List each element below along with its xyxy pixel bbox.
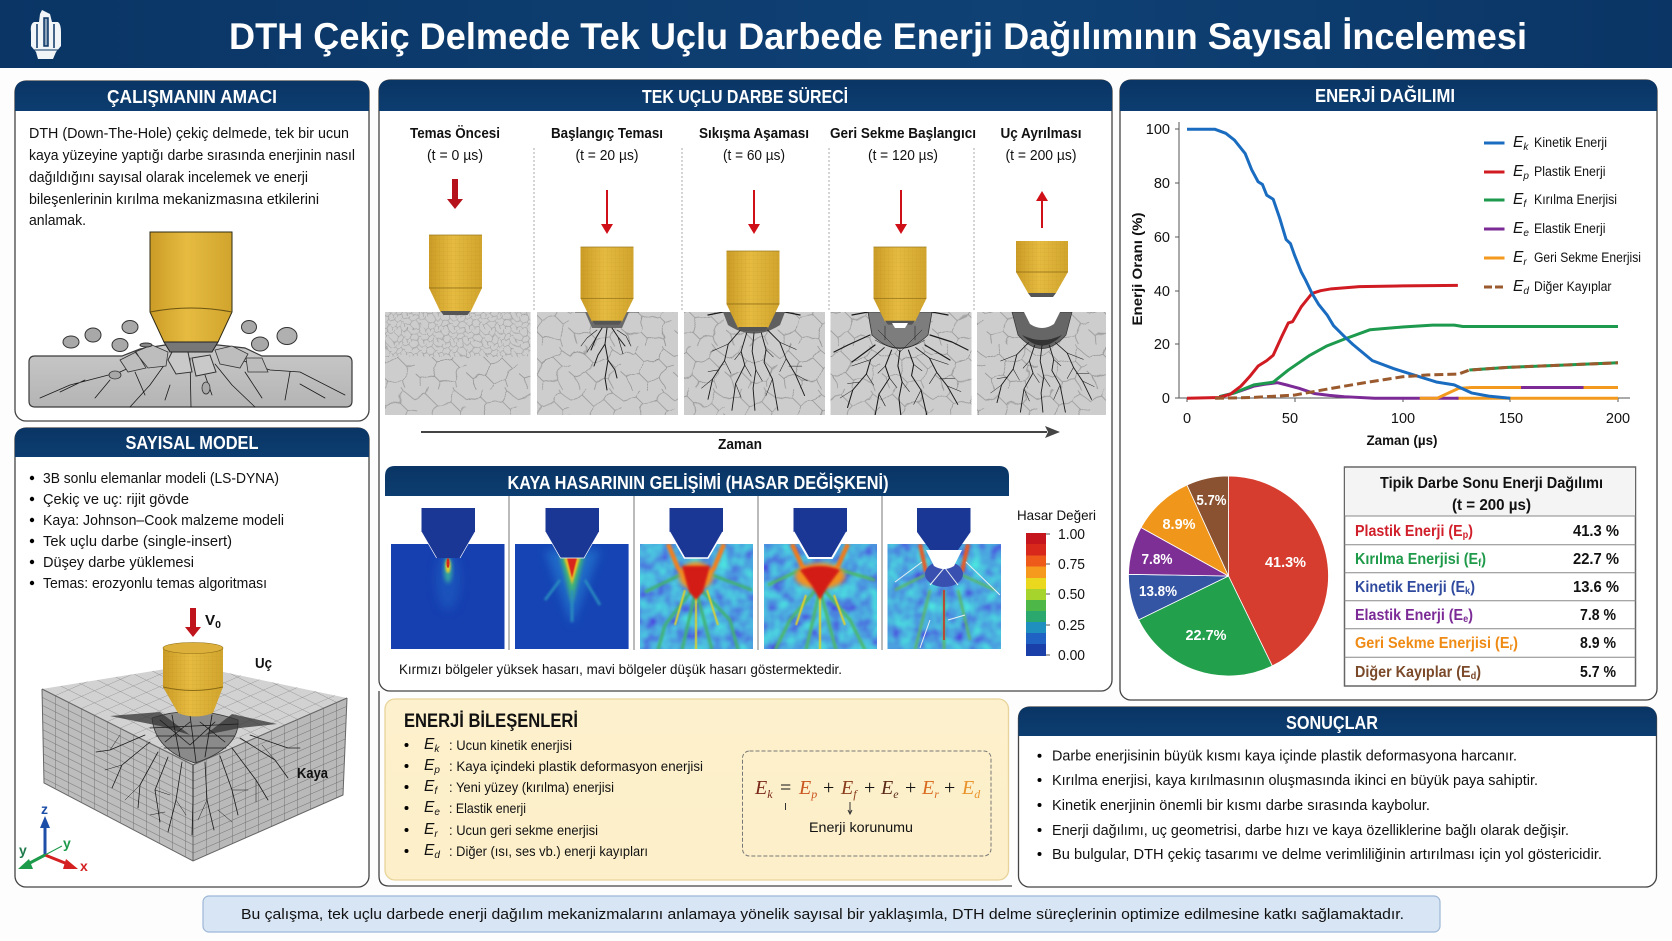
stage 5: uç ayrılması: (t = 200 µs) bbox=[1006, 148, 1076, 164]
conclusions list: Darbe enerjisinin büyük kısmı kaya içinde plastik deformasyona harcanır. bbox=[1052, 749, 1517, 765]
bullet list: Düşey darbe yüklemesi bbox=[43, 555, 194, 571]
table: end-of-impact energy distribution: Diğer Kayıplar (E bbox=[1355, 664, 1480, 681]
pie chart: 22.7% bbox=[1186, 627, 1226, 644]
line chart: 0 bbox=[1162, 391, 1170, 407]
icon: coordinate axes bbox=[18, 801, 88, 874]
panel: sayısal model bbox=[15, 428, 369, 887]
energy conservation equation box: E bbox=[841, 777, 853, 799]
energy conservation equation box: + bbox=[864, 777, 875, 799]
panel: tek uçlu darbe süreci bbox=[379, 80, 1113, 886]
chart legend: r bbox=[1523, 257, 1527, 268]
energy conservation equation box: e bbox=[893, 787, 899, 801]
pie chart: 13.8% bbox=[1139, 583, 1177, 600]
bullet list: Kaya: Johnson–Cook malzeme modeli bbox=[43, 513, 284, 529]
colorbar legend: 0.50 bbox=[1058, 587, 1085, 603]
colorbar legend: 0.00 bbox=[1058, 648, 1085, 664]
chart legend: E bbox=[1513, 191, 1523, 208]
chart legend: Elastik Enerji bbox=[1534, 221, 1606, 236]
chart legend: Kinetik Enerji bbox=[1534, 135, 1607, 150]
illustration: tool striking rock bbox=[29, 232, 352, 407]
stage 1: temas öncesi bbox=[380, 125, 536, 420]
purpose text block: bileşenlerinin kırılma mekanizmasına etkilerini bbox=[29, 192, 319, 208]
damage map 2 bbox=[515, 508, 629, 649]
energy component list: E bbox=[424, 757, 434, 774]
colorbar legend: 0.75 bbox=[1058, 557, 1085, 573]
table: end-of-impact energy distribution: 5.7 % bbox=[1580, 664, 1616, 681]
bullet list: Çekiç ve uç: rijit gövde bbox=[43, 492, 189, 508]
table: end-of-impact energy distribution: Tipik Darbe Sonu Enerji Dağılımı bbox=[1380, 475, 1603, 492]
table: end-of-impact energy distribution: ) bbox=[1470, 579, 1475, 596]
table: end-of-impact energy distribution: Elastik Enerji (E bbox=[1355, 607, 1472, 624]
panel: sonuçlar bbox=[1018, 707, 1656, 887]
chart legend: p bbox=[1522, 171, 1529, 182]
energy component list bbox=[404, 736, 703, 861]
chart legend: Diğer Kayıplar bbox=[1534, 279, 1612, 294]
bullet list bbox=[30, 471, 284, 592]
heading: ENERJİ DAĞILIMI bbox=[1315, 85, 1455, 106]
energy component list: : Elastik enerji bbox=[449, 800, 526, 816]
heading: SONUÇLAR bbox=[1286, 713, 1378, 733]
stage 5: uç ayrılması: Uç Ayrılması bbox=[1000, 126, 1082, 142]
colorbar legend: 1.00 bbox=[1058, 527, 1085, 543]
footer summary bar: Bu çalışma, tek uçlu darbede enerji dağılım mekanizmalarını anlamaya yönelik sayısal bir yaklaşımla, DTH delme süreçlerinin optimize edilmesine katkı sağlamaktadır. bbox=[241, 906, 1404, 923]
table: end-of-impact energy distribution: ) bbox=[1468, 607, 1473, 624]
chart legend: E bbox=[1513, 134, 1523, 151]
chart legend: Kırılma Enerjisi bbox=[1534, 192, 1617, 207]
stage 2: başlangıç teması: (t = 20 µs) bbox=[576, 148, 638, 164]
energy component list: : Kaya içindeki plastik deformasyon enerjisi bbox=[449, 758, 703, 774]
line chart: 40 bbox=[1154, 284, 1170, 300]
line chart: 100 bbox=[1391, 411, 1415, 427]
energy conservation equation box bbox=[742, 751, 991, 856]
title: DTH Çekiç Delmede Tek Uçlu Darbede Enerji Dağılımının Sayısal İncelemesi bbox=[229, 16, 1527, 57]
label: Kaya: Kaya bbox=[297, 766, 329, 782]
arrow: zaman bbox=[421, 426, 1060, 453]
icon: coordinate axes: x bbox=[80, 858, 88, 874]
pie chart bbox=[1128, 476, 1329, 676]
damage map 3 bbox=[640, 508, 753, 650]
damage map 1 bbox=[391, 508, 504, 649]
stage 4: geri sekme başlangıcı bbox=[824, 126, 979, 420]
purpose text block: anlamak. bbox=[29, 213, 86, 229]
caption: Kırmızı bölgeler yüksek hasarı, mavi bölgeler düşük hasarı göstermektedir. bbox=[399, 661, 842, 677]
line chart: 200 bbox=[1606, 411, 1630, 427]
energy component list: : Ucun geri sekme enerjisi bbox=[449, 822, 598, 838]
stage 1: temas öncesi: Temas Öncesi bbox=[410, 125, 500, 142]
heading: SAYISAL MODEL bbox=[126, 433, 259, 453]
panel: enerji bileşenleri bbox=[385, 699, 1008, 880]
energy component list: E bbox=[424, 799, 434, 816]
pie chart: 5.7% bbox=[1196, 492, 1226, 509]
energy conservation equation box: + bbox=[905, 777, 916, 799]
stage 3: sıkışma aşaması: Sıkışma Aşaması bbox=[699, 126, 809, 142]
conclusions list bbox=[1038, 749, 1602, 863]
table: end-of-impact energy distribution: Plastik Enerji (E bbox=[1355, 523, 1472, 540]
energy conservation equation box: Enerji korunumu bbox=[809, 819, 913, 835]
energy component list: E bbox=[424, 821, 434, 838]
line chart: 0 bbox=[1183, 411, 1191, 427]
chart legend: k bbox=[1523, 142, 1529, 153]
table: end-of-impact energy distribution: 41.3 % bbox=[1573, 523, 1619, 540]
line chart: 100 bbox=[1146, 122, 1170, 138]
stage 2: başlangıç teması: Başlangıç Teması bbox=[551, 126, 663, 142]
conclusions list: Kırılma enerjisi, kaya kırılmasının oluşmasında ikinci en büyük paya sahiptir. bbox=[1052, 773, 1538, 789]
energy component list: : Yeni yüzey (kırılma) enerjisi bbox=[449, 779, 614, 795]
arrow: V0 impact velocity: 0 bbox=[215, 620, 221, 631]
line chart: 20 bbox=[1154, 337, 1170, 353]
chart legend: e bbox=[1523, 228, 1529, 239]
bullet list: Temas: erozyonlu temas algoritması bbox=[43, 576, 267, 592]
energy conservation equation box: E bbox=[799, 777, 811, 799]
energy component list: d bbox=[434, 850, 440, 861]
table: end-of-impact energy distribution: d bbox=[1471, 671, 1476, 682]
heading: ÇALIŞMANIN AMACI bbox=[107, 87, 277, 107]
table: end-of-impact energy distribution bbox=[1344, 467, 1636, 686]
energy conservation equation box: E bbox=[922, 777, 934, 799]
damage map 4 bbox=[764, 508, 877, 650]
table: end-of-impact energy distribution: 13.6 % bbox=[1573, 579, 1619, 596]
line chart: 50 bbox=[1282, 411, 1298, 427]
table: end-of-impact energy distribution: (t = 200 µs) bbox=[1452, 497, 1531, 514]
line chart bbox=[1129, 122, 1641, 448]
icon: DTH drill hammer logo bbox=[31, 10, 61, 59]
chart legend: E bbox=[1513, 249, 1523, 266]
energy conservation equation box: d bbox=[974, 787, 981, 801]
energy conservation equation box: f bbox=[853, 787, 858, 801]
energy conservation equation box: E bbox=[755, 777, 767, 799]
pie chart: 41.3% bbox=[1265, 554, 1306, 571]
stage 4: geri sekme başlangıcı: (t = 120 µs) bbox=[868, 148, 938, 164]
stage 3: sıkışma aşaması: (t = 60 µs) bbox=[723, 148, 785, 164]
footer summary bar bbox=[203, 896, 1440, 932]
heading: ENERJİ BİLEŞENLERİ bbox=[404, 711, 578, 732]
panel: enerji dağılımı bbox=[203, 80, 1657, 932]
energy component list: k bbox=[434, 744, 440, 755]
energy conservation equation box: + bbox=[944, 777, 955, 799]
colorbar legend: Hasar Değeri bbox=[1017, 507, 1096, 523]
purpose text block: kaya yüzeyine yaptığı darbe sırasında enerjinin nasıl bbox=[29, 148, 355, 164]
colorbar legend bbox=[1017, 507, 1096, 664]
conclusions list: Enerji dağılımı, uç geometrisi, darbe hızı ve kaya özelliklerine bağlı olarak değişir. bbox=[1052, 823, 1569, 839]
energy conservation equation box: r bbox=[934, 787, 939, 801]
table: end-of-impact energy distribution: p bbox=[1463, 530, 1468, 541]
icon: coordinate axes: y bbox=[63, 835, 71, 851]
chart legend: Plastik Enerji bbox=[1534, 164, 1606, 179]
outline continuation beneath components panel bbox=[379, 691, 1012, 886]
chart legend: E bbox=[1513, 220, 1523, 237]
purpose text block bbox=[29, 126, 355, 229]
energy component list: E bbox=[424, 736, 434, 753]
energy conservation equation box: E bbox=[881, 777, 893, 799]
energy component list: E bbox=[424, 778, 434, 795]
line chart: 60 bbox=[1154, 230, 1170, 246]
table: end-of-impact energy distribution: k bbox=[1465, 586, 1471, 597]
icon: coordinate axes: z bbox=[41, 801, 48, 817]
table: end-of-impact energy distribution: ) bbox=[1481, 551, 1486, 568]
pie chart: 8.9% bbox=[1162, 516, 1196, 533]
table: end-of-impact energy distribution: Kinetik Enerji (E bbox=[1355, 579, 1474, 596]
energy conservation equation box: + bbox=[823, 777, 834, 799]
table: end-of-impact energy distribution: f bbox=[1478, 558, 1482, 569]
arrow: zaman: Zaman bbox=[718, 437, 762, 453]
chart legend: E bbox=[1513, 163, 1523, 180]
bullet list: 3B sonlu elemanlar modeli (LS-DYNA) bbox=[43, 471, 279, 487]
stage 4: geri sekme başlangıcı: Geri Sekme Başlangıcı bbox=[830, 126, 976, 142]
header band bbox=[0, 0, 1672, 68]
arrow: V0 impact velocity: V bbox=[205, 613, 215, 629]
panel: çalışmanın amacı bbox=[15, 81, 369, 421]
line chart: Enerji Oranı (%) bbox=[1129, 212, 1145, 326]
energy conservation equation box: = bbox=[780, 777, 791, 799]
table: end-of-impact energy distribution: 22.7 % bbox=[1573, 551, 1619, 568]
heading: TEK UÇLU DARBE SÜRECİ bbox=[642, 87, 848, 107]
table: end-of-impact energy distribution: ) bbox=[1513, 635, 1518, 652]
colorbar legend: 0.25 bbox=[1058, 618, 1085, 634]
energy component list: p bbox=[433, 765, 440, 776]
stage 2: başlangıç teması bbox=[537, 127, 678, 415]
stage separators bbox=[534, 148, 974, 312]
energy component list: : Diğer (ısı, ses vb.) enerji kayıpları bbox=[449, 843, 648, 859]
energy conservation equation box: p bbox=[810, 787, 817, 801]
table: end-of-impact energy distribution: 8.9 % bbox=[1580, 635, 1616, 652]
panel: kaya hasarının gelişimi bbox=[385, 466, 1096, 677]
3D rock block mesh bbox=[42, 665, 347, 861]
line chart: 150 bbox=[1499, 411, 1523, 427]
arrow: V0 impact velocity bbox=[185, 608, 221, 637]
energy component list: e bbox=[434, 807, 440, 818]
table: end-of-impact energy distribution: 7.8 % bbox=[1580, 607, 1616, 624]
pie chart: 7.8% bbox=[1142, 551, 1172, 568]
chart legend bbox=[1484, 134, 1641, 297]
table: end-of-impact energy distribution: e bbox=[1463, 614, 1469, 625]
stage 3: sıkışma aşaması bbox=[684, 127, 825, 415]
line chart: Zaman (µs) bbox=[1366, 432, 1438, 448]
stage 1: temas öncesi: (t = 0 µs) bbox=[427, 148, 483, 164]
chart legend: Geri Sekme Enerjisi bbox=[1534, 250, 1641, 265]
conclusions list: Kinetik enerjinin önemli bir kısmı darbe sırasında kaybolur. bbox=[1052, 798, 1430, 814]
table: end-of-impact energy distribution: r bbox=[1510, 642, 1513, 653]
energy component list: f bbox=[434, 786, 438, 797]
table: end-of-impact energy distribution: Kırılma Enerjisi (E bbox=[1355, 551, 1488, 568]
bullet list: Tek uçlu darbe (single-insert) bbox=[43, 534, 232, 550]
energy conservation equation box: E bbox=[962, 777, 974, 799]
purpose text block: dağıldığını sayısal olarak incelemek ve enerji bbox=[29, 170, 308, 186]
conclusions list: Bu bulgular, DTH çekiç tasarımı ve delme verimliliğinin artırılması için yol göstericidir. bbox=[1052, 847, 1602, 863]
table: end-of-impact energy distribution: ) bbox=[1476, 664, 1481, 681]
chart legend: E bbox=[1513, 278, 1523, 295]
stage 5: uç ayrılması bbox=[977, 127, 1106, 415]
label: Uç: Uç bbox=[255, 656, 272, 672]
energy component list: E bbox=[424, 842, 434, 859]
energy component list: r bbox=[434, 829, 438, 840]
energy component list: : Ucun kinetik enerjisi bbox=[449, 737, 572, 753]
icon: Uç tip bbox=[163, 642, 223, 716]
line chart: 80 bbox=[1154, 176, 1170, 192]
chart legend: d bbox=[1523, 286, 1529, 297]
damage map 5 bbox=[888, 508, 1001, 650]
table: end-of-impact energy distribution: ) bbox=[1468, 523, 1473, 540]
table: end-of-impact energy distribution: Geri Sekme Enerjisi (E bbox=[1355, 635, 1520, 652]
chart legend: f bbox=[1523, 199, 1527, 210]
energy conservation equation box: k bbox=[767, 787, 773, 801]
purpose text block: DTH (Down-The-Hole) çekiç delmede, tek bir ucun bbox=[29, 126, 349, 142]
heading: KAYA HASARININ GELİŞİMİ (HASAR DEĞİŞKENİ) bbox=[508, 472, 888, 493]
icon: coordinate axes: y bbox=[19, 842, 27, 858]
